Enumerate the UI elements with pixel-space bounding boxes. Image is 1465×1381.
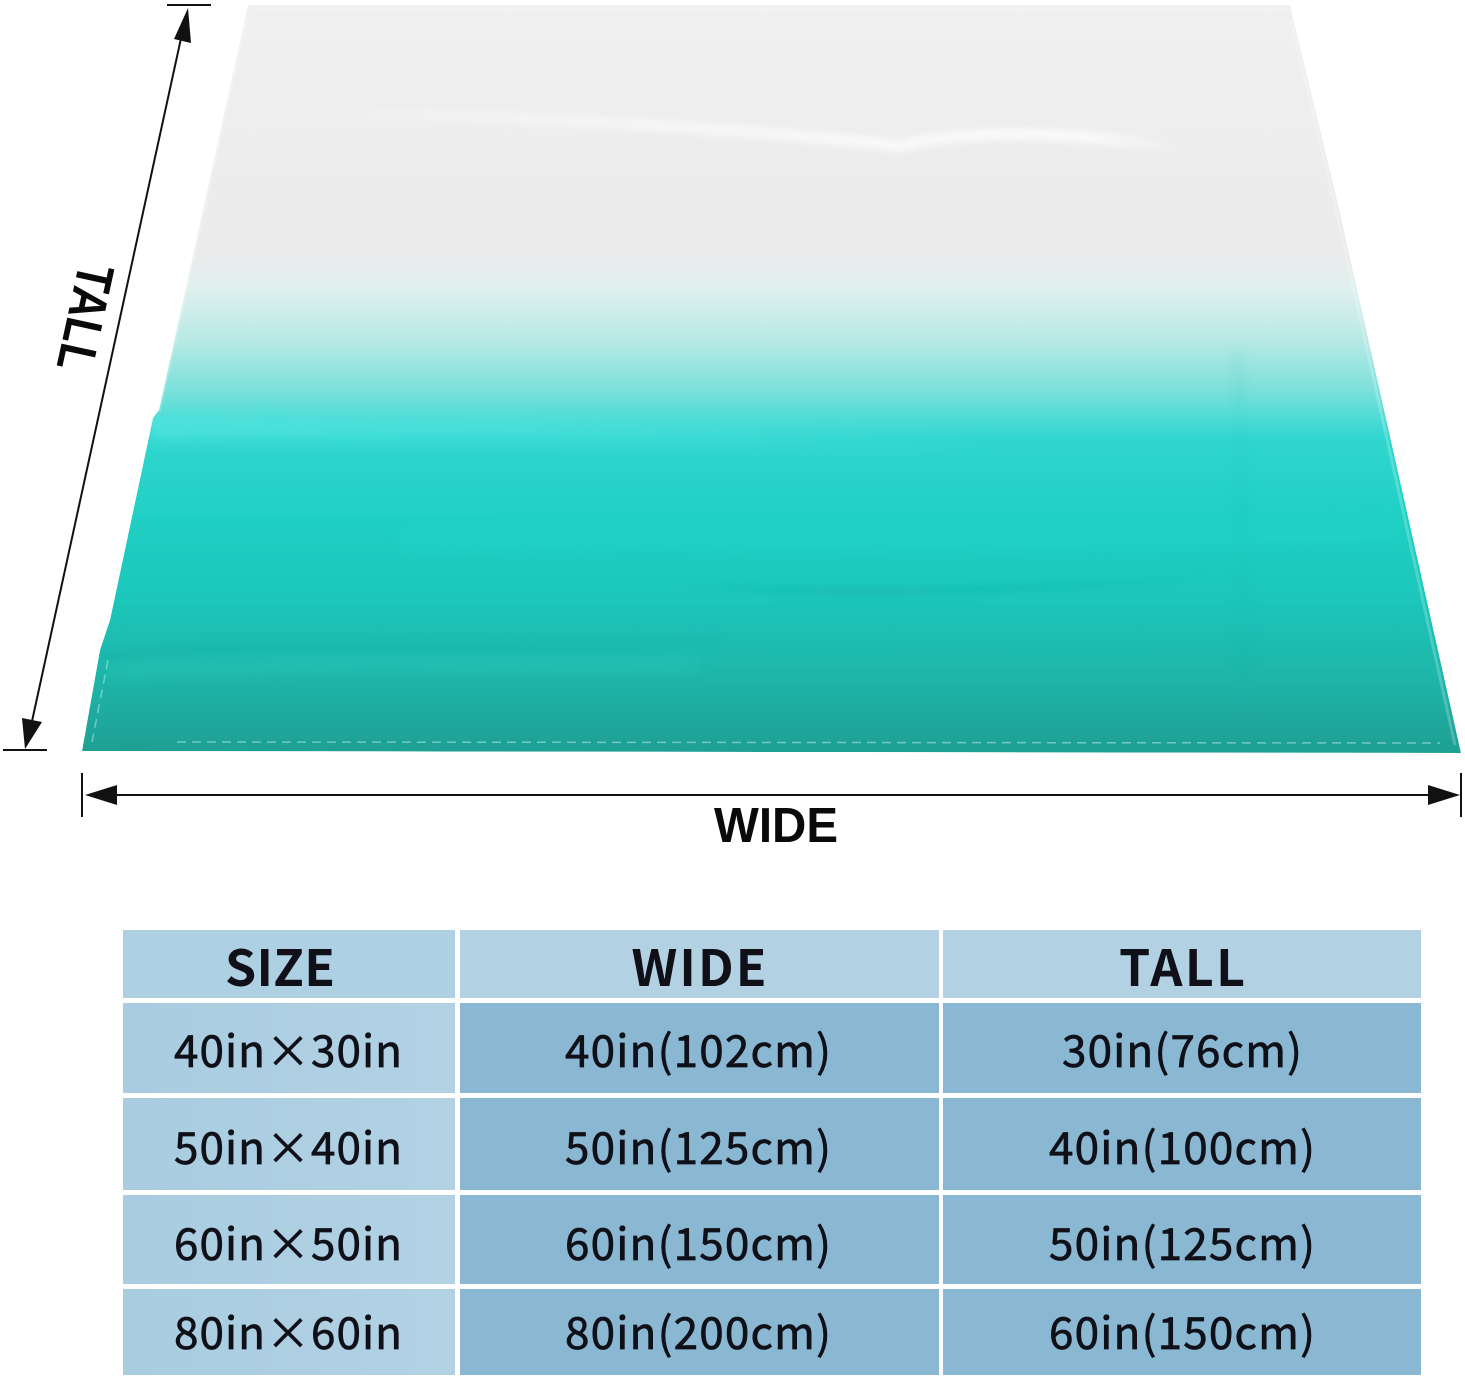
row: 80in x 60in: 60in(150cm): [1049, 1298, 1315, 1362]
wide label: WIDE: [714, 799, 838, 853]
row: 60in x 50in: 60in(150cm): [565, 1209, 831, 1273]
header row: SIZE: [225, 929, 335, 1001]
row: 80in x 60in: [123, 1289, 1421, 1375]
row: 40in x 30in: [123, 1003, 1421, 1093]
row: 50in x 40in: [123, 1098, 1421, 1190]
row: 80in x 60in: 80in(200cm): [565, 1298, 831, 1362]
size table: [123, 929, 1421, 1375]
header row: WIDE: [632, 929, 766, 1001]
row: 60in x 50in: 50in(125cm): [1049, 1209, 1315, 1273]
row: 40in x 30in: 40in(102cm): [565, 1016, 831, 1080]
row: 50in x 40in: 50in×40in: [174, 1113, 402, 1177]
tall arrow: [3, 5, 211, 750]
blanket: [82, 5, 1461, 753]
row: 40in x 30in: 40in×30in: [174, 1016, 402, 1080]
row: 60in x 50in: 60in×50in: [174, 1209, 402, 1273]
row: 80in x 60in: 80in×60in: [174, 1298, 402, 1362]
row: 50in x 40in: 40in(100cm): [1049, 1113, 1315, 1177]
row: 40in x 30in: 30in(76cm): [1062, 1016, 1302, 1080]
row: 60in x 50in: [123, 1195, 1421, 1284]
header row: [123, 929, 1421, 1001]
tall label: TALL: [45, 259, 124, 377]
header row: TALL: [1119, 929, 1245, 1001]
wide arrow: [82, 773, 1461, 817]
row: 50in x 40in: 50in(125cm): [565, 1113, 831, 1177]
